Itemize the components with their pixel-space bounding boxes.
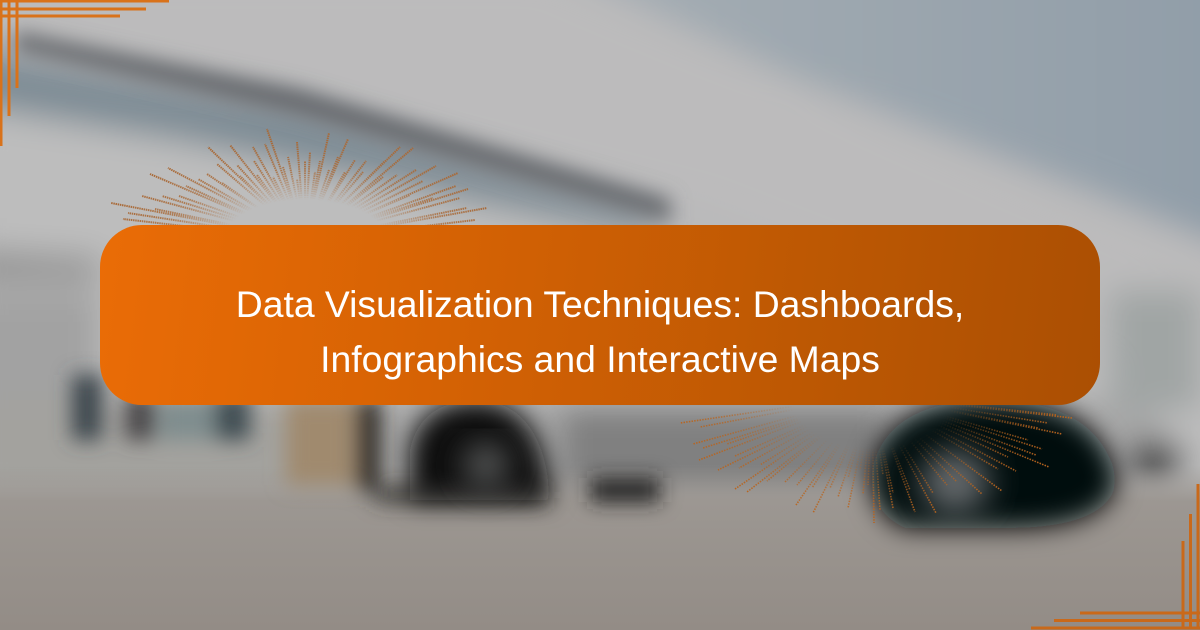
building roofline shadow	[15, 32, 670, 222]
title: Infographics and Interactive Maps	[320, 338, 880, 380]
title	[236, 283, 964, 380]
sunburst top left	[111, 129, 487, 240]
ground	[0, 465, 1200, 630]
sunburst bottom right	[680, 395, 1072, 523]
corner lines bottom right	[1031, 484, 1200, 628]
banner	[100, 225, 1100, 405]
title: Data Visualization Techniques: Dashboards,	[236, 283, 964, 325]
corner lines top left	[0, 0, 169, 146]
